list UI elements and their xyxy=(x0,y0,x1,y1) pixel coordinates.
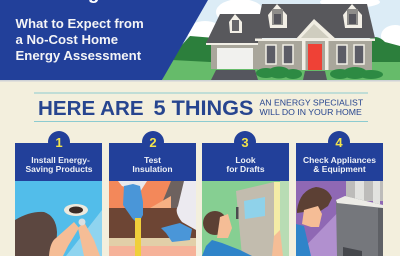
dormers xyxy=(229,4,362,33)
garage roof xyxy=(206,14,262,43)
lower windows xyxy=(266,45,364,64)
panel 3: look for drafts: 3 xyxy=(241,135,249,150)
panel 3: look for drafts: Look xyxy=(235,155,256,165)
panel 2: test insulation: Test xyxy=(144,155,161,165)
main wall xyxy=(258,41,372,70)
panel 2: test insulation: Insulation xyxy=(132,164,173,174)
panel 4: check appliances xyxy=(296,131,383,256)
panel 1: install products: 1 xyxy=(55,135,63,150)
porch gable xyxy=(295,19,337,40)
garage door xyxy=(217,48,253,69)
driveway and path xyxy=(211,70,258,80)
main roof xyxy=(255,4,375,38)
panel 2: test insulation xyxy=(109,131,196,256)
title: What to Expect from xyxy=(16,16,144,31)
header scene: sky, clouds and lawn xyxy=(150,0,400,81)
subheading band: HERE ARE xyxy=(38,97,144,120)
title xyxy=(16,16,144,63)
garage wall xyxy=(211,44,259,69)
blue title banner xyxy=(0,0,208,80)
title: a No-Cost Home xyxy=(16,32,118,47)
title: Energy Assessment xyxy=(16,48,142,63)
panel 4: check appliances: & Equipment xyxy=(313,164,366,174)
panel 3: look for drafts xyxy=(202,131,289,256)
subheading band: AN ENERGY SPECIALIST xyxy=(260,98,364,108)
panel 4: check appliances: 4 xyxy=(335,135,343,150)
panel 3: look for drafts: for Drafts xyxy=(226,164,265,174)
panel 4: check appliances: Check Appliances xyxy=(303,155,376,165)
panel 1: install products: Saving Products xyxy=(25,164,93,174)
illustration: house xyxy=(206,4,383,80)
subheading band: WILL DO IN YOUR HOME xyxy=(260,107,362,117)
panel 2: test insulation: 2 xyxy=(149,135,157,150)
subheading band: 5 THINGS xyxy=(154,95,254,120)
panel 1: install products xyxy=(15,131,102,256)
panel 1: install products: Install Energy- xyxy=(31,155,90,165)
shrubs xyxy=(256,66,383,79)
red front door xyxy=(308,44,322,70)
subheading band xyxy=(34,92,368,122)
